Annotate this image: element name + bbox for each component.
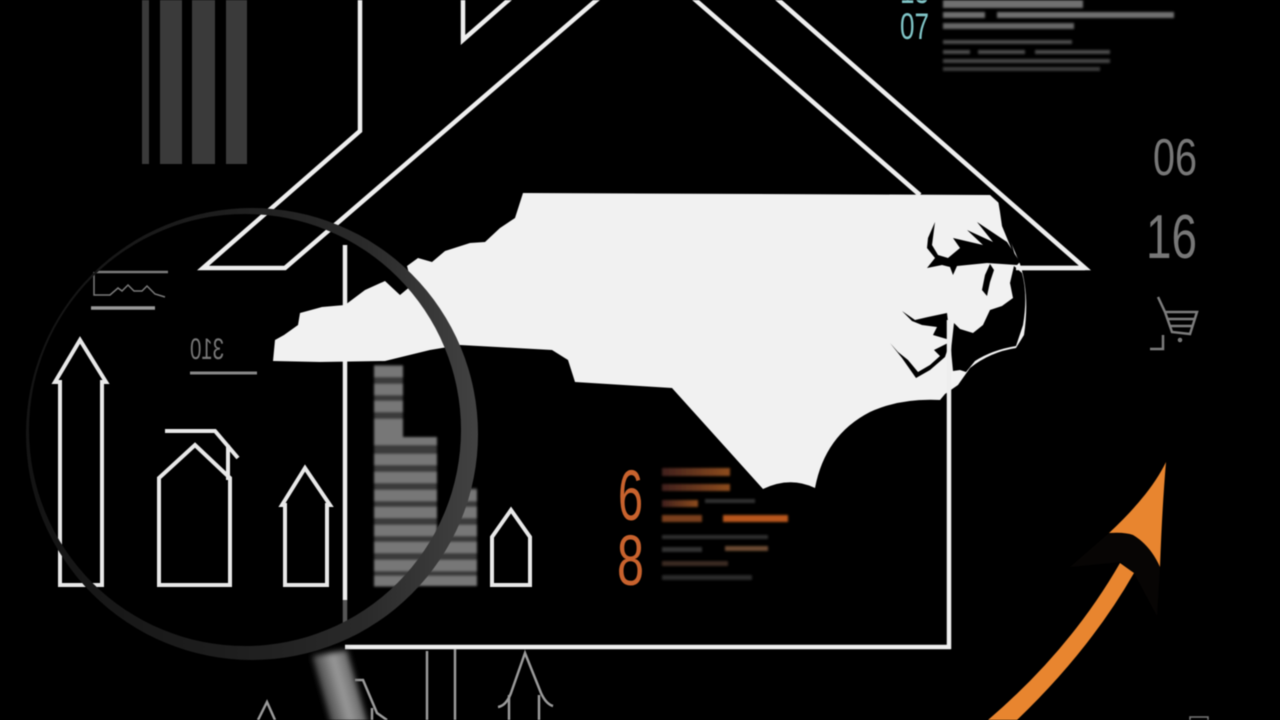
map: Pamlico sound cutout [951,266,1025,372]
mini line chart [91,272,168,308]
number 8: 8 [617,522,644,601]
map: Neuse river cutout [890,342,950,378]
number 06: 06 [1153,129,1197,187]
arrow shadow [1070,533,1160,616]
right wall and roof edge over map [949,268,1085,649]
small house 1 [55,340,106,585]
gray stripes inside the lens [374,365,437,587]
underline below mirrored number [190,372,257,374]
number 07: 07 [900,6,929,47]
map: Pamlico river cutout [902,311,950,340]
top-left vertical bars [142,0,247,164]
icon: shopping cart [1150,297,1197,349]
arrow head [1109,462,1166,567]
number 16: 16 [1146,203,1197,272]
map: inlet cutout [982,264,994,296]
map: Albemarle sound cutout [927,222,1020,275]
magnifier handle [312,650,368,720]
small house 2 [159,431,238,585]
map: North Carolina [273,193,1026,489]
small house 4 [492,510,530,585]
map: northern crack along the banks [998,200,1017,262]
magnifier ring [26,208,478,660]
mirrored number in lens: 310 [190,333,224,366]
magnifying glass [26,208,478,720]
small house 3 [282,468,330,585]
orange growth arrow [988,462,1166,720]
arrow shaft [988,563,1134,720]
gray stripes outside the lens [418,486,479,588]
number 6: 6 [618,457,643,536]
top-right text bars [943,0,1174,71]
orange text bars [662,468,788,580]
house outline [203,0,1085,647]
small box at bottom right [1190,717,1208,720]
lower faint houses [258,649,553,720]
